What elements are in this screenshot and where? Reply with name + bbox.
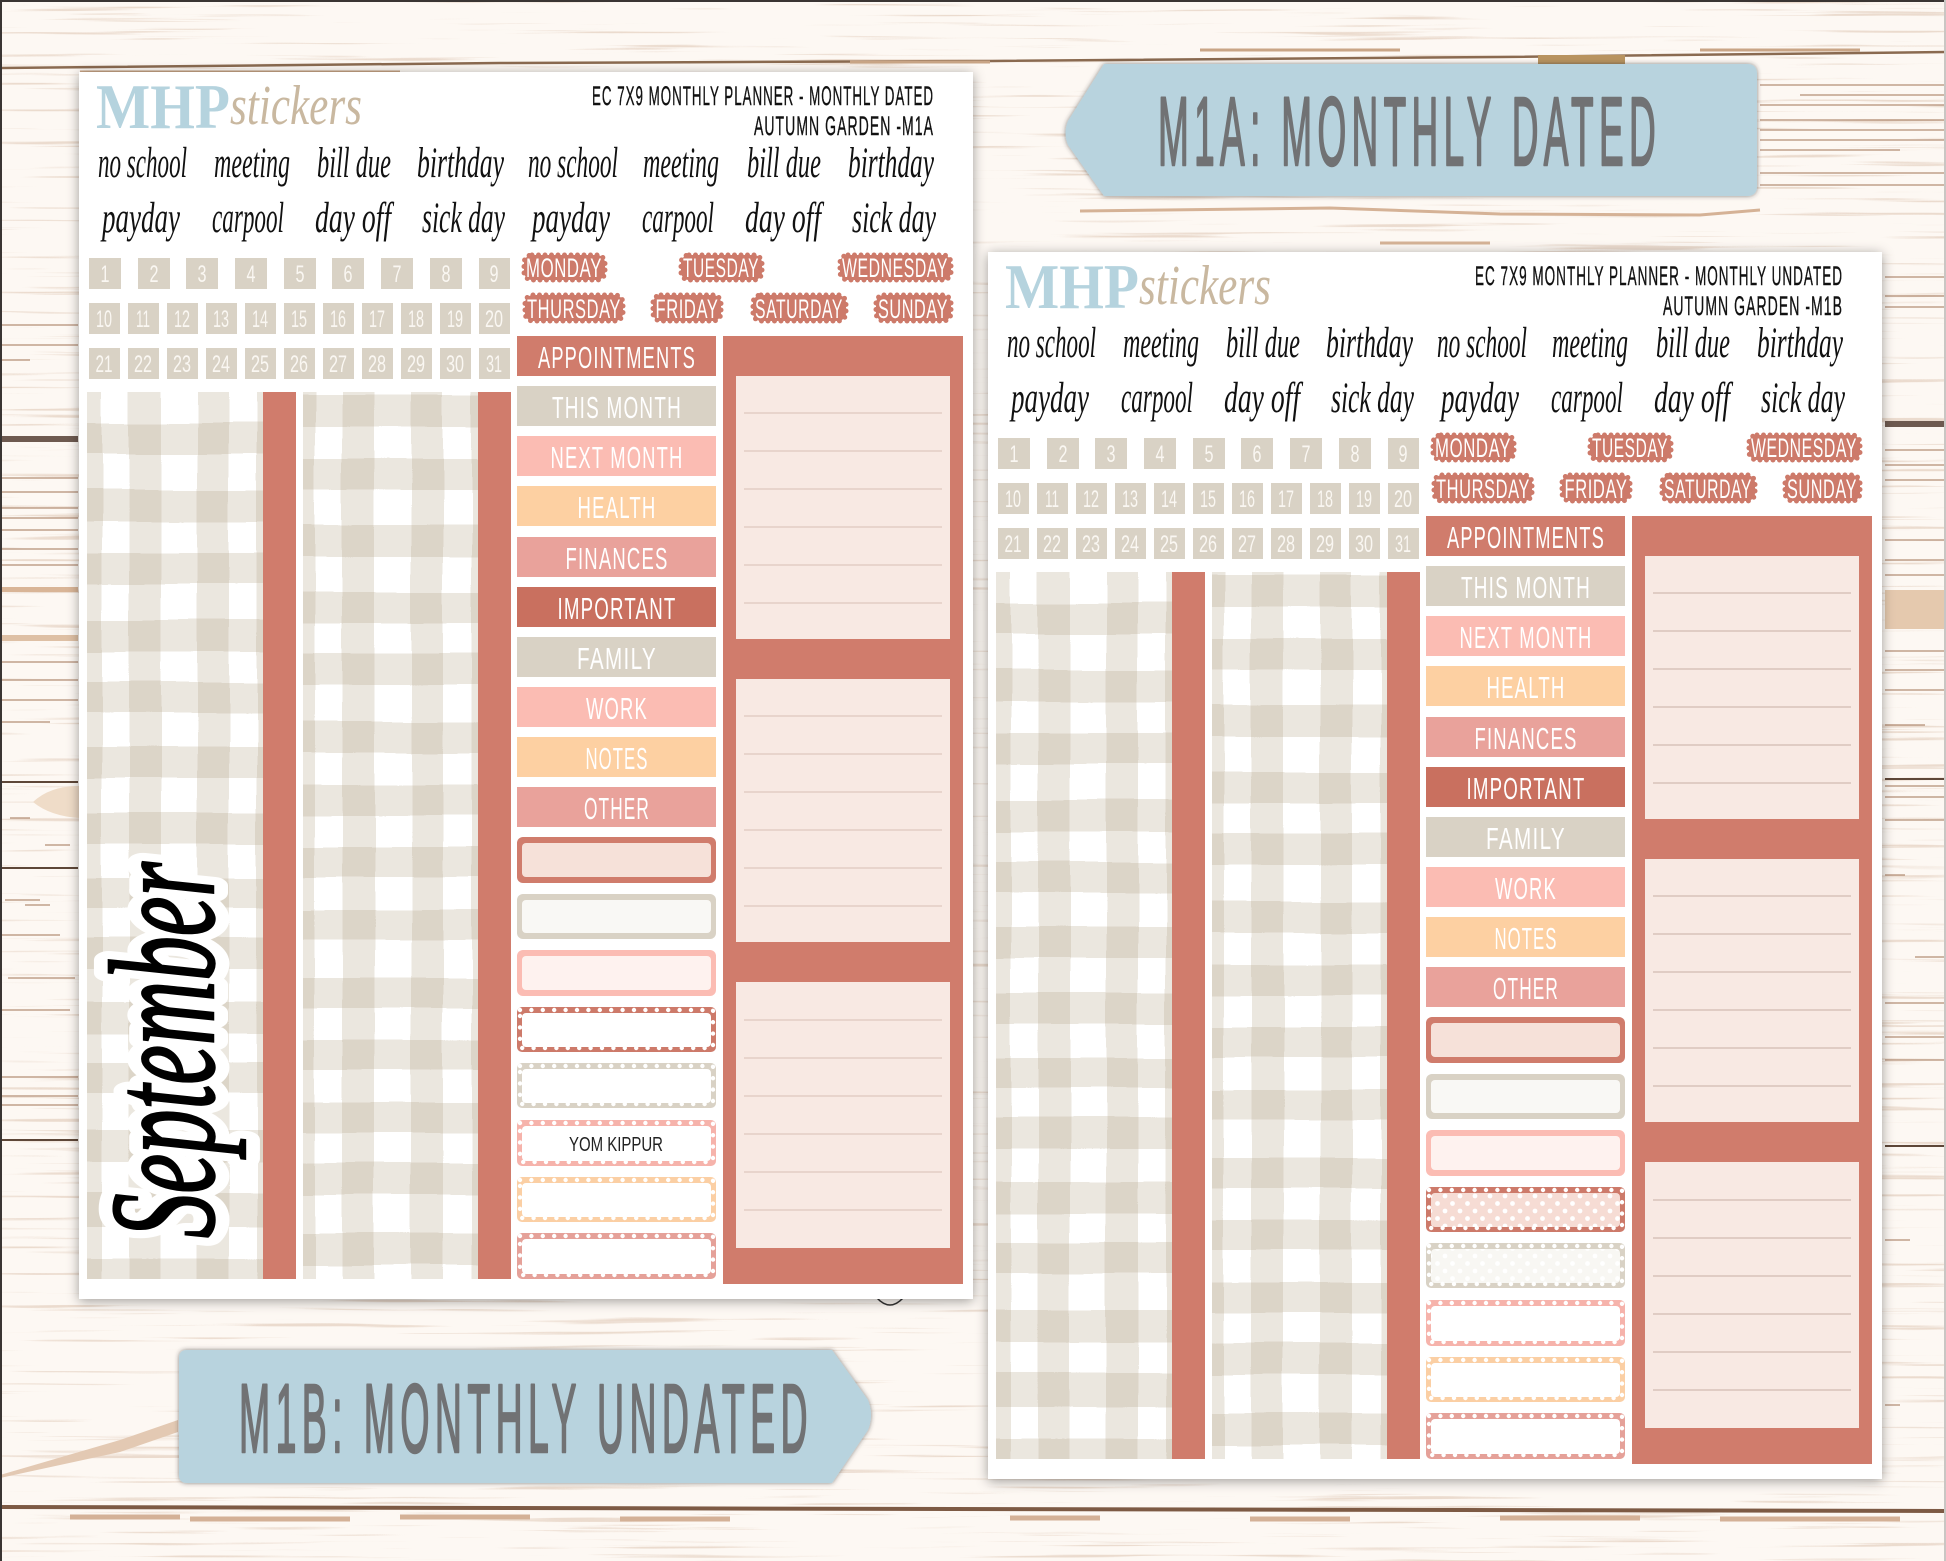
rounded boxes [517,837,716,996]
category labels: NEXT MONTH [1460,620,1592,655]
category labels: OTHER [1493,971,1559,1006]
gingham strip 1 [996,572,1172,1459]
category labels [1426,516,1625,1007]
weekday stickers: TUESDAY [1592,433,1668,463]
date number squares: 22 [1043,531,1061,558]
scalloped boxes [517,1007,716,1279]
scalloped boxes: YOM KIPPUR [569,1134,663,1156]
date number squares: 6 [1252,441,1262,468]
script word stickers: day off [1654,375,1733,422]
date number squares [89,258,510,379]
date number squares: 29 [1316,531,1334,558]
bar 1 [1172,572,1205,1459]
date number squares: 18 [408,306,424,333]
script word stickers: no school [1437,320,1527,367]
date number squares: 7 [1302,441,1310,468]
category labels: OTHER [584,791,650,826]
date number squares: 26 [1199,531,1217,558]
date number squares: 14 [252,306,268,333]
date number squares: 8 [442,261,450,288]
weekday stickers [524,253,951,324]
date number squares: 26 [290,351,308,378]
category labels: WORK [586,691,648,726]
script word stickers: bill due [317,140,391,187]
weekday stickers: SUNDAY [878,294,948,324]
date number squares: 23 [173,351,191,378]
September script sticker: September [80,862,246,1238]
script word stickers: sick day [1761,375,1846,422]
bar 1 [263,392,296,1279]
date number squares: 9 [490,261,498,288]
script word stickers: meeting [214,140,290,187]
date number squares: 13 [1122,486,1138,513]
script word stickers: day off [745,195,824,242]
script word stickers: birthday [1757,320,1844,367]
logo [1005,252,1271,322]
date number squares: 18 [1317,486,1333,513]
category labels: IMPORTANT [1466,771,1586,806]
date number squares: 20 [1394,486,1412,513]
weekday stickers: MONDAY [526,253,602,283]
date number squares: 25 [1160,531,1178,558]
category labels: HEALTH [1486,670,1566,705]
category labels: NOTES [586,741,648,776]
script word stickers [1007,320,1846,422]
date number squares: 6 [344,261,352,288]
date number squares: 2 [1058,441,1068,468]
date number squares: 4 [1156,441,1164,468]
script word stickers [98,140,937,242]
category labels: IMPORTANT [558,591,676,626]
weekday stickers: WEDNESDAY [842,253,948,283]
weekday stickers: SATURDAY [755,294,843,324]
date number squares: 7 [392,261,402,288]
script word stickers: meeting [643,140,719,187]
date number squares: 10 [1005,486,1021,513]
date number squares: 25 [251,351,269,378]
script word stickers: payday [100,195,181,242]
category labels: APPOINTMENTS [538,340,696,375]
date number squares: 22 [134,351,152,378]
weekday stickers: WEDNESDAY [1751,433,1857,463]
date number squares: 31 [486,351,502,378]
date number squares: 17 [369,306,385,333]
bar 2 [1387,572,1420,1459]
script word stickers: no school [528,140,618,187]
date number squares: 11 [136,306,150,333]
script word stickers: no school [1007,320,1096,367]
date number squares: 11 [1045,486,1059,513]
category labels [517,336,716,827]
script word stickers: no school [98,140,187,187]
category labels: WORK [1495,871,1557,906]
date number squares: 21 [96,351,112,378]
date number squares: 13 [213,306,229,333]
date number squares: 10 [96,306,112,333]
notes panel [723,336,963,1284]
weekday stickers [1433,433,1860,504]
script word stickers: birthday [417,140,505,187]
script word stickers: day off [315,195,394,242]
date number squares: 29 [407,351,425,378]
date number squares: 17 [1278,486,1294,513]
date number squares: 5 [296,261,304,288]
date number squares: 12 [174,306,190,333]
script word stickers: payday [530,195,611,242]
script word stickers: day off [1224,375,1303,422]
weekday stickers: SUNDAY [1787,474,1857,504]
script word stickers: meeting [1123,320,1199,367]
date number squares: 30 [1355,531,1373,558]
script word stickers: bill due [747,140,821,187]
date number squares: 5 [1204,441,1214,468]
weekday stickers: MONDAY [1435,433,1511,463]
date number squares [998,438,1419,559]
weekday stickers: FRIDAY [1564,474,1628,504]
category labels: NEXT MONTH [550,440,684,475]
logo: stickers [1139,255,1271,317]
category labels: FINANCES [1474,721,1578,756]
category labels: HEALTH [578,490,656,525]
weekday stickers: SATURDAY [1664,474,1752,504]
script word stickers: carpool [1121,375,1193,422]
notes panel [1632,516,1872,1464]
category labels: FINANCES [566,541,668,576]
date number squares: 19 [447,306,463,333]
date number squares: 2 [150,261,158,288]
bar 2 [478,392,511,1279]
script word stickers: sick day [1331,375,1415,422]
sheet: M1A monthly dated: EC 7X9 MONTHLY PLANNER - MONTHLY DATED [592,81,934,111]
date number squares: 1 [1010,441,1018,468]
sheet: M1B monthly undated [969,252,1882,1480]
script word stickers: sick day [422,195,506,242]
script word stickers: birthday [1326,320,1414,367]
date number squares: 3 [198,261,206,288]
weekday stickers: THURSDAY [527,294,621,324]
date number squares: 31 [1395,531,1411,558]
category labels: FAMILY [577,641,657,676]
date number squares: 30 [446,351,464,378]
date number squares: 14 [1161,486,1177,513]
date number squares: 20 [485,306,503,333]
date number squares: 9 [1398,441,1408,468]
date number squares: 24 [212,351,230,378]
script word stickers: payday [1009,375,1090,422]
date number squares: 28 [368,351,386,378]
title text [592,81,934,141]
weekday stickers: FRIDAY [656,294,718,324]
logo [96,72,362,142]
date number squares: 24 [1121,531,1139,558]
date number squares: 15 [291,306,307,333]
category labels: APPOINTMENTS [1447,520,1605,555]
gingham strip 2 [303,392,478,1279]
category labels: THIS MONTH [1461,570,1591,605]
title text: AUTUMN GARDEN -M1A [754,111,934,141]
date number squares: 1 [100,261,110,288]
September script sticker [80,862,246,1238]
date number squares: 21 [1004,531,1022,558]
script word stickers: meeting [1552,320,1628,367]
logo: stickers [230,75,362,137]
text: M1B: MONTHLY UNDATED [239,1364,813,1473]
icon: sticker loop under sheet [877,1298,903,1305]
date number squares: 4 [246,261,256,288]
date number squares: 28 [1277,531,1295,558]
script word stickers: carpool [212,195,284,242]
September script sticker: September [80,862,246,1238]
category labels: THIS MONTH [552,390,682,425]
gingham strip 2 [1212,572,1387,1459]
date number squares: 19 [1356,486,1372,513]
date number squares: 16 [1239,486,1255,513]
logo: MHP [1005,252,1139,322]
date number squares: 27 [329,351,347,378]
tab: M1A monthly dated [1066,64,1757,196]
script word stickers: payday [1439,375,1520,422]
script word stickers: birthday [848,140,935,187]
script word stickers: bill due [1226,320,1300,367]
category labels: FAMILY [1486,821,1566,856]
date number squares: 16 [330,306,346,333]
date number squares: 8 [1350,441,1360,468]
tab: M1B monthly undated [179,1350,871,1483]
script word stickers: bill due [1656,320,1730,367]
title text [1475,261,1843,321]
date number squares: 12 [1083,486,1099,513]
date number squares: 23 [1082,531,1100,558]
sheet: M1A monthly dated [60,72,973,1300]
rounded boxes [1426,1017,1625,1176]
script word stickers: carpool [642,195,714,242]
date number squares: 3 [1106,441,1116,468]
logo: MHP [96,72,230,142]
scalloped boxes [1426,1187,1625,1459]
weekday stickers: THURSDAY [1436,474,1530,504]
gingham strip 1 [87,392,263,1279]
script word stickers: carpool [1551,375,1623,422]
date number squares: 27 [1238,531,1256,558]
category labels: NOTES [1494,921,1558,956]
date number squares: 15 [1200,486,1216,513]
script word stickers: sick day [852,195,937,242]
weekday stickers: TUESDAY [683,253,759,283]
